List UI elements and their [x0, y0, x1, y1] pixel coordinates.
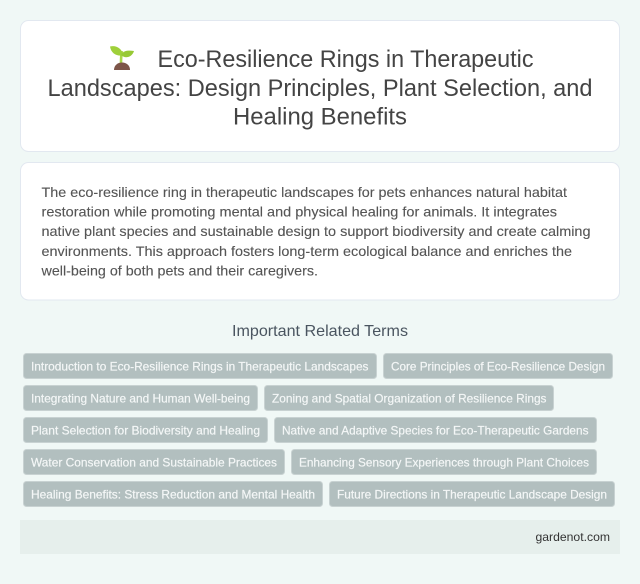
- tag: Enhancing Sensory Experiences through Plant Choices: [299, 456, 589, 470]
- title: Eco-Resilience Rings in Therapeutic: [158, 46, 534, 73]
- tag: Future Directions in Therapeutic Landscape Design: [337, 488, 607, 502]
- tag: [274, 418, 596, 442]
- title: Healing Benefits: [233, 104, 407, 130]
- title: Landscapes: Design Principles, Plant Selection, and: [48, 75, 592, 102]
- tag: Introduction to Eco-Resilience Rings in Therapeutic Landscapes: [31, 360, 368, 374]
- tag: [24, 354, 376, 378]
- title: [48, 46, 592, 130]
- icon: sprout: [110, 46, 134, 70]
- tag: Healing Benefits: Stress Reduction and Mental Health: [31, 488, 315, 502]
- footer source text: gardenot.com: [536, 530, 610, 544]
- tag: Integrating Nature and Human Well-being: [31, 392, 250, 406]
- footer: [20, 520, 620, 554]
- tag: [384, 354, 612, 378]
- tag: Water Conservation and Sustainable Practices: [31, 456, 277, 470]
- summary text: The eco-resilience ring in therapeutic landscapes for pets enhances natural habitat: [42, 184, 567, 200]
- tag: [264, 386, 554, 410]
- summary text: restoration while promoting mental and physical healing for animals. It integrates: [42, 204, 557, 220]
- summary text: environments. This approach fosters long-term ecological balance and enriches the: [42, 243, 572, 259]
- tag: [24, 450, 284, 474]
- tag: [24, 386, 258, 410]
- tag: Plant Selection for Biodiversity and Healing: [31, 424, 260, 438]
- summary text: native plant species and sustainable design to support biodiversity and create calming: [42, 223, 590, 239]
- tag: [24, 418, 268, 442]
- panel: header card: [20, 20, 620, 152]
- panel: summary: [20, 162, 620, 300]
- heading: related terms: Important Related Terms: [232, 323, 408, 340]
- tag: Core Principles of Eco-Resilience Design: [391, 360, 605, 374]
- tag: [292, 450, 596, 474]
- tag: [330, 482, 614, 506]
- summary text: [40, 184, 590, 278]
- tag: [24, 482, 322, 506]
- tag list: [24, 354, 614, 506]
- summary text: well-being of both pets and their caregivers.: [40, 262, 318, 278]
- tag: Native and Adaptive Species for Eco-Therapeutic Gardens: [282, 424, 588, 438]
- tag: Zoning and Spatial Organization of Resilience Rings: [272, 392, 546, 406]
